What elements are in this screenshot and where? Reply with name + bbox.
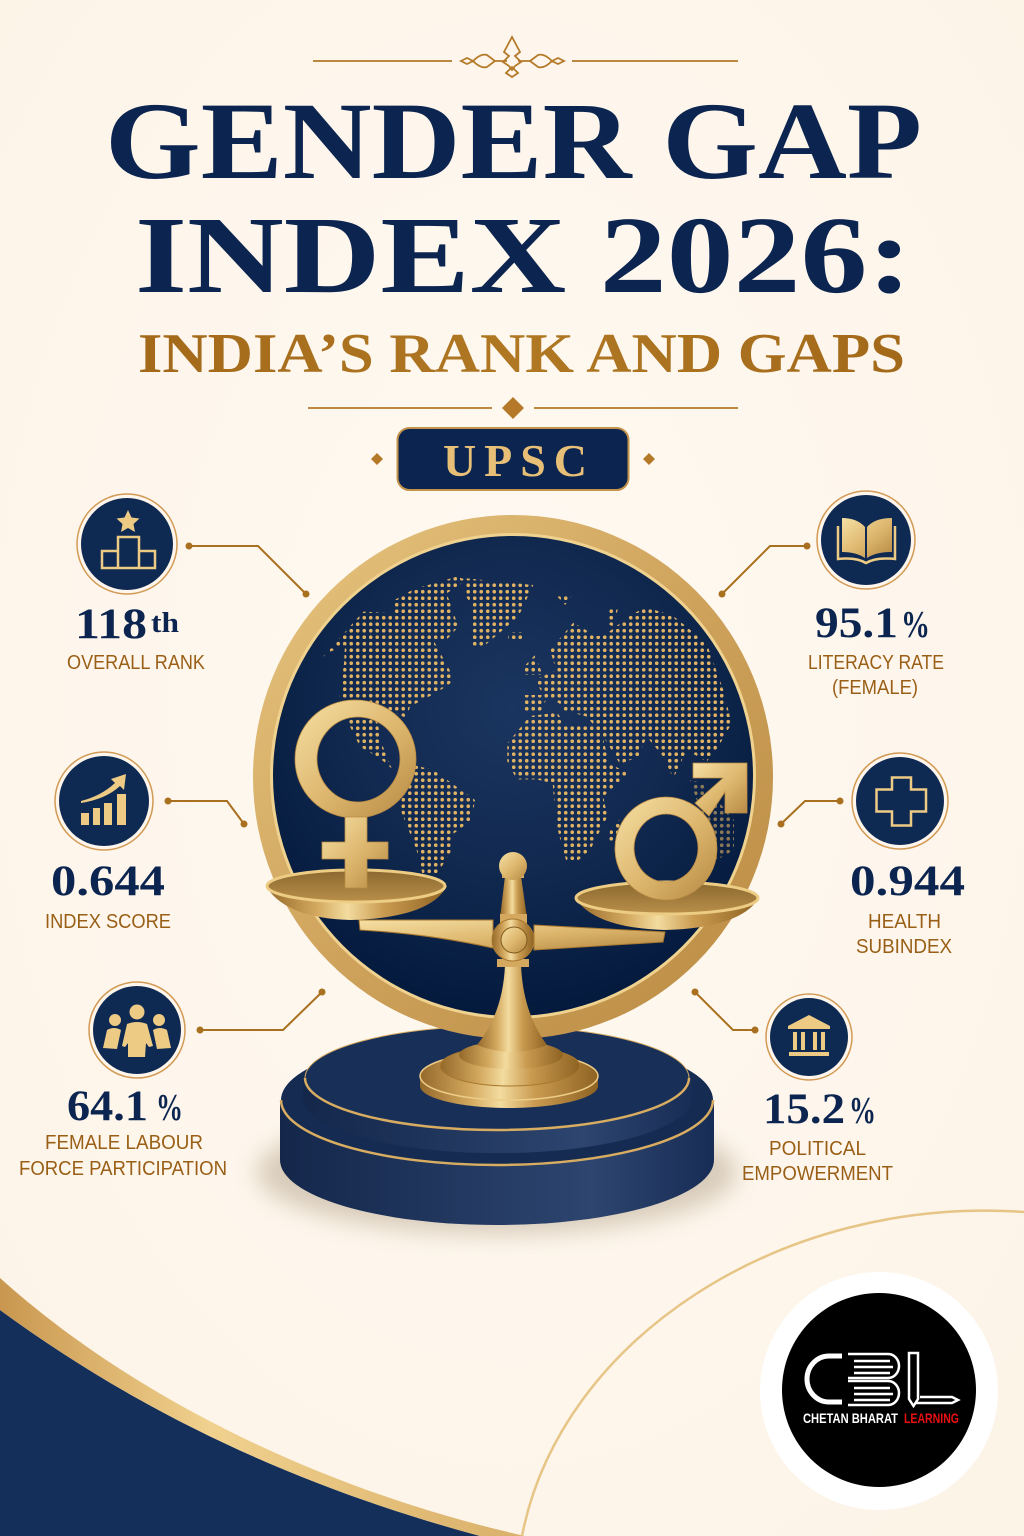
stat: female labour force participation: FORCE PARTICIPATION bbox=[19, 1157, 227, 1180]
stat: female labour force participation: FEMALE LABOUR bbox=[45, 1131, 203, 1154]
icon: open book bbox=[817, 491, 915, 589]
stat: female labour force participation: 64.1 bbox=[67, 1083, 148, 1130]
logo: Chetan Bharat Learning bbox=[760, 1272, 998, 1510]
stat: political empowerment: % bbox=[849, 1090, 876, 1132]
icon: parliament building bbox=[766, 994, 852, 1080]
dotted world map bbox=[320, 577, 734, 875]
stat: political empowerment bbox=[742, 994, 893, 1185]
icon: podium with star bbox=[77, 494, 177, 594]
navy plinth bbox=[280, 1026, 714, 1225]
balance scale bbox=[266, 700, 759, 1108]
logo: Chetan Bharat Learning: LEARNING bbox=[904, 1410, 959, 1426]
stat: female literacy rate bbox=[808, 491, 944, 699]
stat: health subindex: SUBINDEX bbox=[856, 935, 952, 958]
stat: political empowerment: 15.2 bbox=[763, 1086, 845, 1133]
logo: Chetan Bharat Learning: CHETAN BHARAT bbox=[803, 1410, 898, 1426]
logo monogram CBL bbox=[807, 1353, 958, 1406]
stat: female labour force participation bbox=[19, 982, 227, 1180]
stat: index score: 0.644 bbox=[51, 858, 165, 905]
stat: overall rank: th bbox=[151, 608, 179, 639]
ornament: subtitle divider bbox=[308, 397, 738, 419]
title: INDEX 2026: bbox=[135, 194, 912, 316]
left pan bbox=[266, 870, 447, 920]
stat: index score bbox=[45, 752, 171, 933]
icon: three people bbox=[89, 982, 185, 1078]
stat: female literacy rate: 95.1 bbox=[815, 600, 898, 647]
bottom right gold arc bbox=[522, 1211, 1024, 1536]
icon: medical cross bbox=[852, 753, 948, 849]
right pan bbox=[575, 882, 759, 930]
stat: index score: INDEX SCORE bbox=[45, 910, 171, 933]
title: GENDER GAP bbox=[105, 80, 922, 202]
female symbol bbox=[295, 700, 416, 888]
subtitle: INDIA’S RANK AND GAPS bbox=[138, 323, 905, 385]
stat: female literacy rate: LITERACY RATE bbox=[808, 651, 944, 674]
badge: UPSC bbox=[371, 428, 655, 490]
title bbox=[105, 80, 922, 316]
plinth shadow bbox=[257, 1110, 737, 1234]
bottom left swoosh bbox=[0, 1278, 525, 1536]
connector lines bbox=[164, 542, 844, 1034]
stat: overall rank: OVERALL RANK bbox=[67, 651, 205, 674]
ornament: top divider bbox=[313, 37, 738, 77]
badge: UPSC: UPSC bbox=[443, 435, 587, 486]
stat: political empowerment: POLITICAL bbox=[769, 1137, 866, 1160]
scale stand bbox=[420, 852, 598, 1108]
stat: political empowerment: EMPOWERMENT bbox=[742, 1162, 893, 1185]
stat: overall rank: 118 bbox=[75, 601, 147, 648]
male symbol bbox=[615, 763, 747, 900]
stat: female labour force participation: % bbox=[156, 1087, 183, 1129]
stat: female literacy rate: % bbox=[901, 604, 930, 646]
stat: health subindex: HEALTH bbox=[868, 910, 941, 933]
stat: female literacy rate: (FEMALE) bbox=[832, 676, 918, 699]
stat: overall rank bbox=[67, 494, 205, 674]
scale beam bbox=[359, 920, 665, 950]
stat: health subindex: 0.944 bbox=[850, 858, 965, 905]
globe with gold ring bbox=[253, 515, 773, 1039]
icon: rising bar chart bbox=[55, 752, 153, 850]
stat: health subindex bbox=[850, 753, 965, 958]
